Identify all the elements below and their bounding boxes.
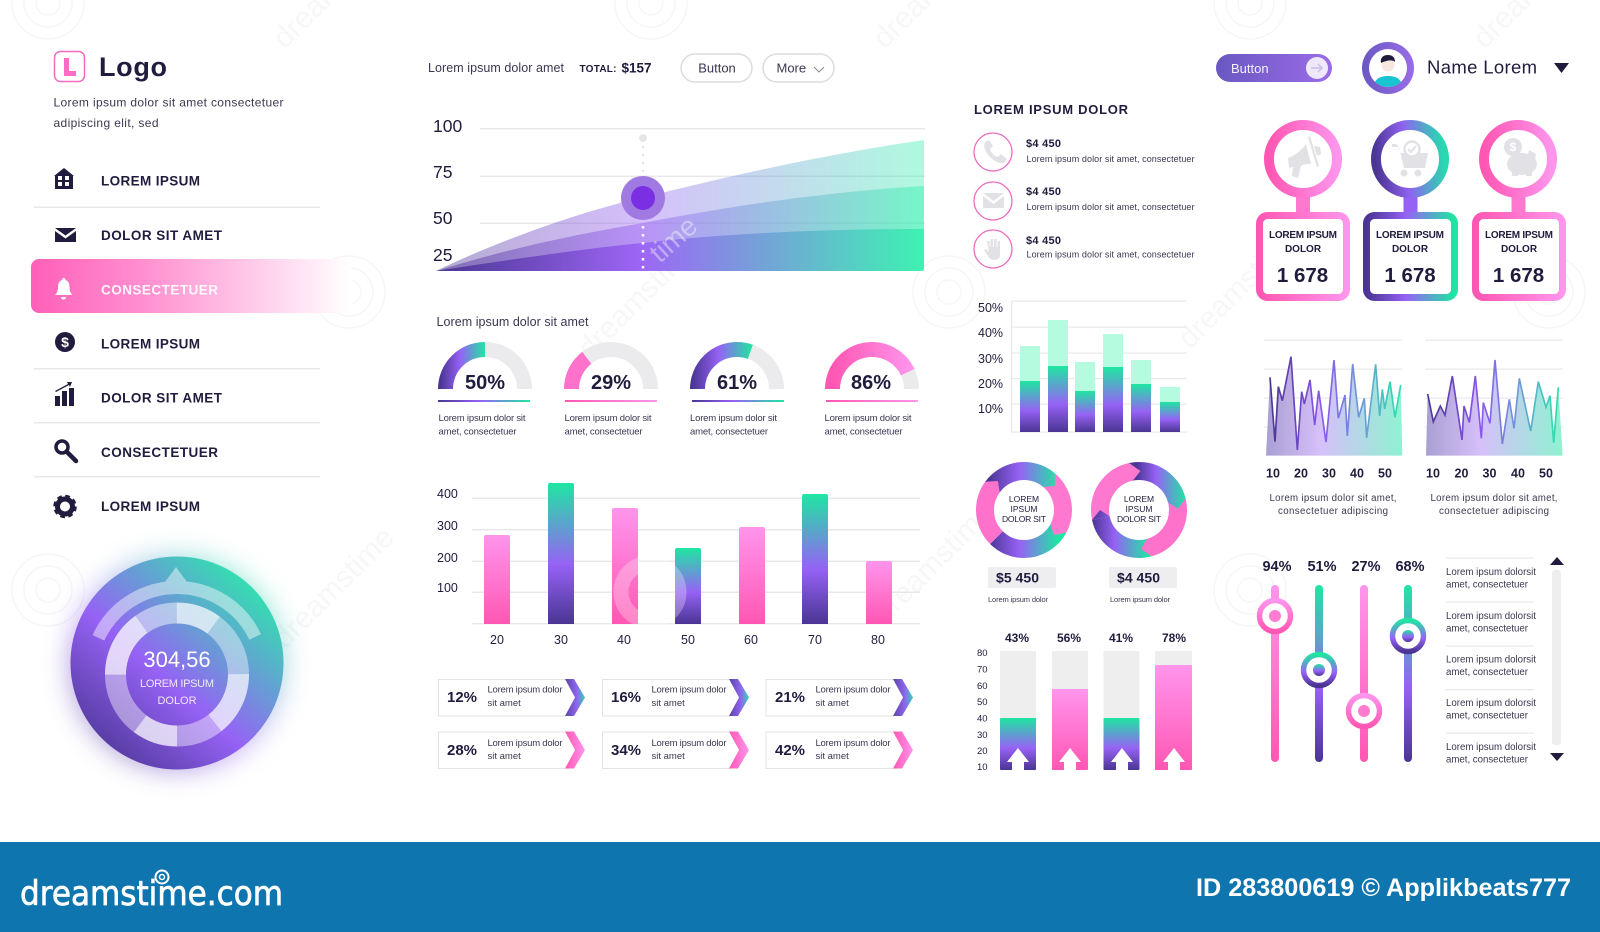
stacked chart y labels bbox=[978, 301, 1003, 416]
card 34% bbox=[602, 732, 749, 768]
ring bbox=[1484, 125, 1552, 193]
sparkline 2 area and line bbox=[1426, 360, 1563, 456]
marker dotted line bbox=[639, 134, 647, 270]
donut 1 label bbox=[1002, 494, 1046, 524]
list rows: amet, consectetuer bbox=[1446, 580, 1529, 590]
gauge 61%: amet, consectetuer bbox=[690, 426, 768, 438]
donut 2 label: IPSUM bbox=[1126, 504, 1152, 514]
watermark background: dreamstime bbox=[1172, 221, 1306, 355]
total value: TOTAL: bbox=[580, 64, 616, 75]
total value: $157 bbox=[622, 60, 652, 76]
gauge caption: LOREM IPSUM bbox=[140, 678, 214, 690]
logo block bbox=[54, 52, 284, 130]
gradient button bbox=[1216, 54, 1332, 82]
sparkline 2 x labels: 10 bbox=[1426, 466, 1440, 480]
slider percentages bbox=[1262, 559, 1425, 575]
slider tracks bbox=[1271, 585, 1412, 762]
gauge 61%: 61% bbox=[717, 372, 757, 394]
bar chart y labels: 300 bbox=[437, 519, 458, 533]
sparkline 1 caption bbox=[1270, 493, 1396, 517]
tagline: Lorem ipsum dolor sit amet consectetuer bbox=[54, 96, 284, 110]
card text bbox=[1269, 230, 1337, 287]
stat card 1 bbox=[1260, 125, 1346, 298]
active menu highlight bbox=[31, 259, 351, 313]
scroll up arrow bbox=[1550, 557, 1564, 565]
banner credit: ID 283800619 © Applikbeats777 bbox=[1196, 874, 1571, 902]
card 21%: sit amet bbox=[816, 698, 849, 709]
card 42%: 42% bbox=[775, 742, 805, 759]
gauge 61% bbox=[690, 350, 784, 438]
sparkline 2 caption: Lorem ipsum dolor sit amet, bbox=[1430, 493, 1558, 504]
column y labels: 60 bbox=[977, 681, 988, 692]
slider handle 2 bbox=[1304, 654, 1334, 686]
bar chart y labels: 200 bbox=[437, 551, 458, 565]
list rows: amet, consectetuer bbox=[1446, 667, 1529, 678]
sparkline 1 area and line bbox=[1266, 357, 1402, 456]
gauge 29%: amet, consectetuer bbox=[564, 426, 642, 438]
card text: 1 678 bbox=[1493, 264, 1544, 287]
scrollbar track bbox=[1552, 570, 1561, 745]
bar chart y labels bbox=[437, 487, 458, 595]
bar chart y labels: 100 bbox=[437, 581, 458, 595]
bar chart x labels: 60 bbox=[744, 633, 758, 647]
donut 2 value bbox=[1109, 567, 1177, 588]
logo wordmark: Logo bbox=[99, 52, 167, 82]
card 28%: 28% bbox=[447, 742, 477, 759]
card text: LOREM IPSUM bbox=[1269, 230, 1337, 241]
card text: DOLOR bbox=[1501, 244, 1538, 255]
y axis labels: 75 bbox=[433, 162, 452, 182]
card text: LOREM IPSUM bbox=[1376, 230, 1444, 241]
contact item: mail: $4 450 bbox=[1026, 186, 1061, 198]
card 12%: sit amet bbox=[488, 698, 521, 709]
column percentages: 41% bbox=[1109, 631, 1133, 645]
card 16% bbox=[602, 679, 749, 716]
gauge 50%: Lorem ipsum dolor sit bbox=[438, 413, 526, 424]
watermark spiral on bars bbox=[621, 563, 679, 621]
menu item: consectetuer active: CONSECTETUER bbox=[101, 282, 218, 298]
watermark background bbox=[12, 0, 1585, 655]
donut 2 label: DOLOR SIT bbox=[1117, 514, 1161, 524]
slider handle 4 bbox=[1392, 620, 1424, 652]
contact item: hand: Lorem ipsum dolor sit amet, consectetuer bbox=[1026, 250, 1194, 260]
section heading: Lorem ipsum dolor sit amet bbox=[436, 315, 589, 329]
column y labels: 30 bbox=[977, 730, 988, 741]
list rows: Lorem ipsum dolorsit bbox=[1446, 567, 1536, 578]
bar chart x labels: 50 bbox=[681, 633, 695, 647]
sparkline 1 caption: Lorem ipsum dolor sit amet, bbox=[1270, 493, 1396, 504]
gauge 29%: 29% bbox=[591, 372, 631, 394]
button: Button bbox=[698, 60, 736, 76]
slider percentages: 27% bbox=[1351, 559, 1381, 575]
y axis labels: 50 bbox=[433, 208, 453, 228]
arrow column chart bbox=[977, 631, 1192, 773]
contact item: mail: Lorem ipsum dolor sit amet, consectetuer bbox=[1026, 202, 1194, 212]
card text: DOLOR bbox=[1285, 244, 1322, 255]
icon: dollar bbox=[55, 332, 75, 352]
tagline bbox=[54, 96, 284, 130]
pin connector bbox=[1404, 192, 1418, 216]
column y labels: 50 bbox=[977, 697, 988, 708]
menu item: consectetuer: CONSECTETUER bbox=[101, 445, 218, 460]
user profile bbox=[1362, 42, 1569, 94]
list rows: amet, consectetuer bbox=[1446, 624, 1529, 634]
list rows: amet, consectetuer bbox=[1446, 754, 1529, 766]
contact item: phone: $4 450 bbox=[1026, 138, 1061, 150]
donut 2 arrow tips bbox=[1092, 463, 1186, 556]
icon: piggy bank: $ bbox=[1510, 140, 1517, 154]
column fills bbox=[1000, 665, 1192, 770]
percentage chevron cards bbox=[438, 679, 913, 768]
column arrows bbox=[1007, 748, 1185, 770]
slider percentages: 51% bbox=[1307, 559, 1337, 575]
list dividers bbox=[1446, 558, 1534, 734]
banner background bbox=[0, 842, 1600, 932]
icon: gear bbox=[55, 496, 75, 516]
y axis labels: 100 bbox=[433, 116, 462, 136]
gauge 61%: Lorem ipsum dolor sit bbox=[690, 413, 777, 424]
more dropdown button bbox=[763, 54, 834, 82]
donut 2 bbox=[1092, 463, 1186, 604]
sparkline 2 x labels bbox=[1426, 466, 1553, 480]
card 34%: sit amet bbox=[652, 751, 685, 762]
card 34%: Lorem ipsum dolor bbox=[652, 738, 726, 749]
card 34%: 34% bbox=[611, 742, 641, 759]
marker dot bbox=[621, 176, 665, 220]
bars bbox=[484, 483, 892, 624]
donut 1 value: $5 450 bbox=[996, 570, 1039, 586]
card 16%: sit amet bbox=[652, 698, 685, 709]
stat card 3 bbox=[1476, 125, 1562, 298]
contact item: phone bbox=[974, 133, 1194, 171]
sparkline 2 x labels: 40 bbox=[1511, 466, 1525, 480]
sparkline chart 1 bbox=[1264, 340, 1402, 517]
sparkline 2 caption: consectetuer adipiscing bbox=[1439, 506, 1549, 517]
bar chart grid bbox=[472, 498, 920, 624]
card text: LOREM IPSUM bbox=[1485, 230, 1553, 241]
gauge value: 304,56 bbox=[143, 647, 211, 672]
sparkline 1 x labels: 30 bbox=[1322, 466, 1336, 480]
sparkline 1 grid bbox=[1264, 340, 1402, 428]
card text: 1 678 bbox=[1277, 264, 1328, 287]
gauges section bbox=[436, 315, 918, 438]
gauge 86%: amet, consectetuer bbox=[824, 426, 902, 438]
list heading: LOREM IPSUM DOLOR bbox=[974, 102, 1129, 117]
widget glow bbox=[69, 555, 285, 771]
stacked chart y labels: 50% bbox=[978, 301, 1003, 315]
column percentages: 43% bbox=[1005, 631, 1029, 645]
gauge 29%: Lorem ipsum dolor sit bbox=[564, 413, 652, 424]
card text bbox=[1376, 230, 1444, 287]
segmented ring bbox=[116, 613, 238, 736]
column y labels: 40 bbox=[977, 714, 988, 724]
icon: bell bbox=[55, 278, 72, 300]
y axis labels bbox=[433, 116, 462, 265]
sparkline 2 x labels: 50 bbox=[1539, 466, 1553, 480]
slider handle 3 bbox=[1348, 696, 1380, 726]
scrollable text list bbox=[1446, 557, 1564, 766]
bar chart bbox=[437, 483, 920, 647]
watermark background: dreamstime bbox=[572, 231, 706, 365]
menu item: dolor sit amet 2: DOLOR SIT AMET bbox=[101, 390, 223, 406]
gauge 50% bbox=[438, 350, 530, 438]
column percentages: 56% bbox=[1057, 631, 1081, 645]
user name: Name Lorem bbox=[1427, 56, 1537, 78]
more dropdown button: More bbox=[776, 60, 806, 76]
ring bbox=[1376, 125, 1444, 193]
card 42%: sit amet bbox=[816, 751, 849, 762]
radial gauge widget bbox=[69, 555, 285, 771]
donut 1 caption: Lorem ipsum dolor bbox=[988, 595, 1048, 604]
vertical sliders bbox=[1260, 559, 1425, 762]
stacked bars: background bbox=[1020, 320, 1180, 432]
navigation menu bbox=[31, 168, 351, 516]
list rows bbox=[1446, 567, 1536, 766]
card text bbox=[1485, 230, 1553, 287]
icon: logo mark bbox=[54, 52, 84, 82]
list rows: Lorem ipsum dolorsit bbox=[1446, 654, 1536, 666]
card 12% bbox=[438, 679, 585, 716]
watermark background: dreamstime bbox=[267, 521, 401, 655]
watermark background: dreamstime bbox=[867, 496, 1001, 630]
gauge caption: DOLOR bbox=[157, 695, 197, 707]
card 21%: 21% bbox=[775, 689, 805, 706]
gauge 86% bbox=[824, 350, 918, 438]
area chart bbox=[433, 116, 925, 271]
list rows: Lorem ipsum dolorsit bbox=[1446, 611, 1536, 622]
column tracks bbox=[1000, 651, 1192, 770]
contact list bbox=[974, 102, 1194, 268]
donut 1 label: IPSUM bbox=[1011, 504, 1037, 514]
footer banner bbox=[0, 842, 1600, 932]
column percentages bbox=[1005, 631, 1186, 645]
card 16%: 16% bbox=[611, 689, 641, 706]
area layers bbox=[436, 140, 924, 271]
icon: piggy bank bbox=[1504, 138, 1537, 176]
menu item: dolor sit amet: DOLOR SIT AMET bbox=[101, 228, 223, 243]
card 21% bbox=[766, 679, 913, 716]
card 42%: Lorem ipsum dolor bbox=[816, 738, 890, 749]
slider percentages: 94% bbox=[1262, 559, 1292, 575]
bar chart x labels bbox=[490, 633, 885, 647]
card box bbox=[1476, 216, 1562, 298]
gauge 29% bbox=[564, 350, 657, 438]
card box bbox=[1260, 216, 1346, 298]
scroll down arrow bbox=[1550, 753, 1564, 761]
toolbar bbox=[428, 54, 834, 82]
bar chart y labels: 400 bbox=[437, 487, 458, 501]
sparkline 1 x labels bbox=[1266, 466, 1392, 480]
slider handle 1 bbox=[1260, 600, 1290, 632]
stacked chart y labels: 20% bbox=[978, 377, 1003, 391]
icon: megaphone bbox=[1288, 136, 1321, 178]
gauge 86%: 86% bbox=[851, 372, 891, 394]
ring bbox=[1269, 125, 1337, 193]
list rows: Lorem ipsum dolorsit bbox=[1446, 698, 1536, 709]
upper arc with pointer bbox=[90, 567, 264, 760]
card 28%: Lorem ipsum dolor bbox=[488, 738, 562, 749]
sparkline 1 x labels: 10 bbox=[1266, 466, 1280, 480]
card 28%: sit amet bbox=[488, 751, 521, 762]
pin connector bbox=[1296, 192, 1310, 216]
stat card 2 bbox=[1366, 125, 1454, 298]
stacked bar chart bbox=[978, 300, 1187, 433]
column percentages: 78% bbox=[1162, 631, 1186, 645]
stacked chart grid bbox=[1011, 300, 1187, 433]
contact item: mail bbox=[974, 182, 1194, 220]
sparkline 2 x labels: 20 bbox=[1454, 466, 1468, 480]
donut 2 caption: Lorem ipsum dolor bbox=[1110, 595, 1170, 604]
donut 2 label: LOREM bbox=[1124, 494, 1154, 504]
stacked chart y labels: 40% bbox=[978, 326, 1003, 340]
gauge 86%: Lorem ipsum dolor sit bbox=[824, 413, 912, 424]
sparkline 2 caption bbox=[1430, 493, 1558, 517]
card 12%: 12% bbox=[447, 689, 477, 706]
bar chart x labels: 40 bbox=[617, 633, 631, 647]
bar chart x labels: 70 bbox=[808, 633, 822, 647]
stacked chart y labels: 30% bbox=[978, 352, 1003, 366]
card 42% bbox=[766, 732, 913, 768]
contact item: hand bbox=[974, 230, 1194, 268]
gauge 50%: 50% bbox=[465, 372, 505, 394]
column y labels: 80 bbox=[977, 648, 988, 659]
donut 2 label bbox=[1117, 494, 1161, 524]
y axis labels: 25 bbox=[433, 245, 452, 265]
banner logo: dreamstime.com bbox=[20, 874, 283, 914]
stacked bars: foreground bbox=[1020, 366, 1180, 432]
total value bbox=[580, 60, 652, 76]
column y labels: 10 bbox=[977, 762, 988, 773]
bar chart x labels: 20 bbox=[490, 633, 504, 647]
card text: DOLOR bbox=[1392, 244, 1429, 255]
column y labels bbox=[977, 648, 988, 773]
avatar bbox=[1362, 42, 1414, 94]
sparkline 1 x labels: 40 bbox=[1350, 466, 1364, 480]
gauge 50%: amet, consectetuer bbox=[438, 426, 516, 438]
column y labels: 70 bbox=[977, 664, 988, 676]
donut 1 arrow tips bbox=[985, 473, 1066, 535]
bar chart x labels: 30 bbox=[554, 633, 568, 647]
icon: home bbox=[54, 168, 74, 189]
menu dividers bbox=[34, 206, 320, 478]
donut 1 label: DOLOR SIT bbox=[1002, 514, 1046, 524]
tagline: adipiscing elit, sed bbox=[54, 116, 158, 130]
button bbox=[681, 54, 752, 82]
bar chart x labels: 80 bbox=[871, 633, 885, 647]
donut 2 value: $4 450 bbox=[1117, 570, 1160, 586]
menu item: lorem ipsum: LOREM IPSUM bbox=[101, 174, 200, 188]
card 12%: Lorem ipsum dolor bbox=[488, 684, 562, 696]
stacked chart y labels: 10% bbox=[978, 402, 1003, 416]
grid lines bbox=[480, 128, 925, 224]
card 21%: Lorem ipsum dolor bbox=[816, 684, 890, 696]
card 16%: Lorem ipsum dolor bbox=[652, 684, 726, 696]
menu item: lorem ipsum 3: LOREM IPSUM bbox=[101, 499, 200, 514]
sparkline 1 x labels: 50 bbox=[1378, 466, 1392, 480]
sparkline 2 grid bbox=[1425, 340, 1563, 428]
slider percentages: 68% bbox=[1395, 559, 1425, 575]
icon: envelope bbox=[55, 228, 76, 242]
card 28% bbox=[438, 732, 585, 768]
donut 1 label: LOREM bbox=[1009, 494, 1039, 504]
donut 1 segments bbox=[985, 471, 1063, 549]
column y labels: 20 bbox=[977, 746, 988, 757]
sparkline 1 caption: consectetuer adipiscing bbox=[1278, 506, 1388, 517]
donut 1 bbox=[985, 471, 1066, 604]
list rows: amet, consectetuer bbox=[1446, 710, 1529, 722]
watermark over area: time bbox=[643, 210, 703, 268]
donut 2 segments bbox=[1100, 471, 1178, 549]
list rows: Lorem ipsum dolorsit bbox=[1446, 742, 1536, 753]
card text: 1 678 bbox=[1384, 264, 1436, 287]
icon: bar chart bbox=[55, 382, 74, 406]
pin connector bbox=[1512, 192, 1526, 216]
contact item: phone: Lorem ipsum dolor sit amet, consectetuer bbox=[1026, 154, 1194, 164]
toolbar label: Lorem ipsum dolor amet bbox=[428, 61, 565, 75]
menu item: lorem ipsum 2: LOREM IPSUM bbox=[101, 336, 200, 352]
sparkline chart 2 bbox=[1425, 340, 1563, 517]
gradient button: Button bbox=[1231, 61, 1269, 76]
icon: dollar: $ bbox=[61, 334, 69, 350]
sparkline 1 x labels: 20 bbox=[1294, 466, 1308, 480]
gauge caption bbox=[140, 678, 214, 707]
sparkline 2 x labels: 30 bbox=[1482, 466, 1496, 480]
icon: cart bbox=[1392, 142, 1428, 176]
dropdown triangle bbox=[1554, 63, 1569, 73]
contact item: hand: $4 450 bbox=[1026, 235, 1061, 247]
card box bbox=[1366, 216, 1454, 298]
icon: magnifier bbox=[56, 441, 76, 461]
widget disc bbox=[70, 556, 284, 770]
